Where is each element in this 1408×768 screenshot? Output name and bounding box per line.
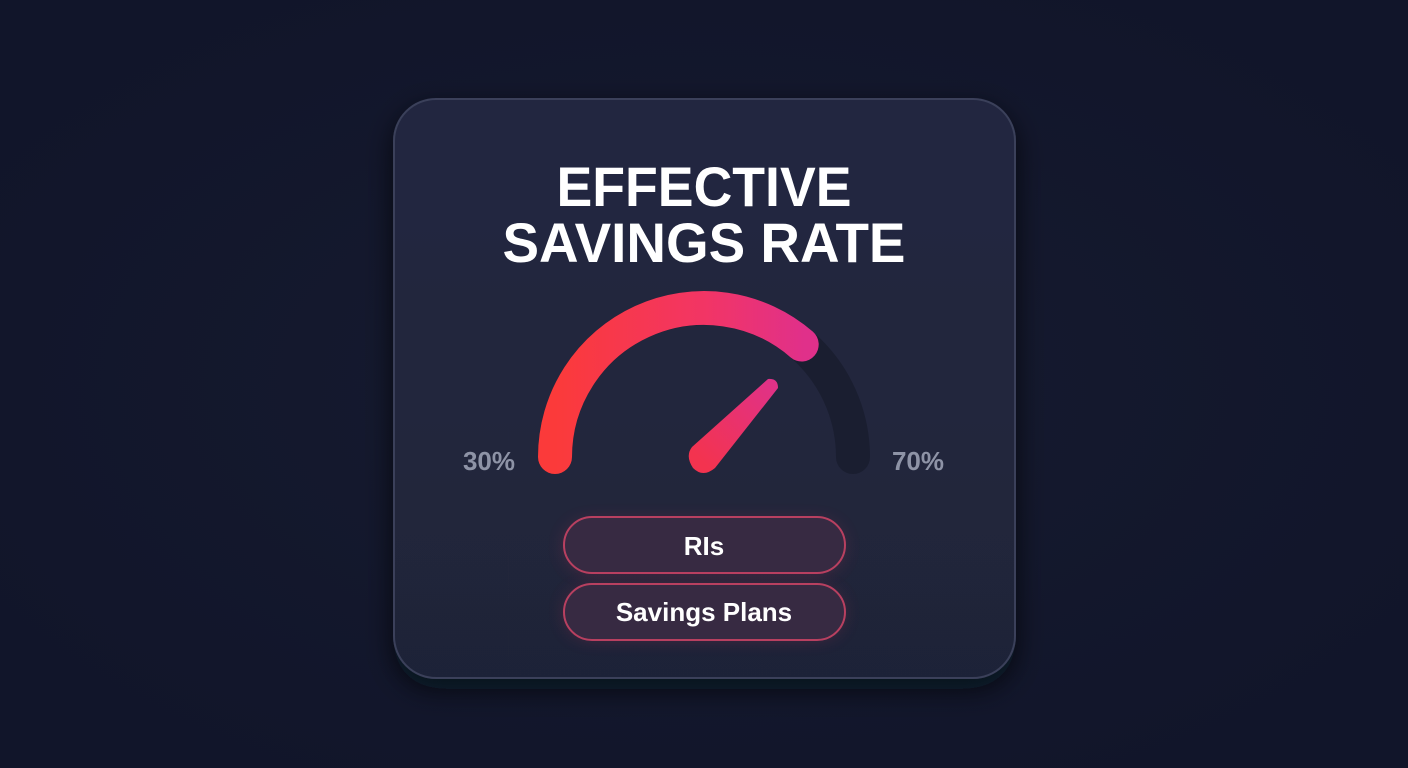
needle xyxy=(689,379,778,473)
title xyxy=(502,155,906,274)
button: RIs: RIs xyxy=(684,531,724,561)
button: Savings Plans: Savings Plans xyxy=(616,597,792,627)
button: Savings Plans xyxy=(564,584,845,640)
label: 70%: 70% xyxy=(892,446,944,476)
label: 30%: 30% xyxy=(463,446,515,476)
panel: card xyxy=(394,99,1015,678)
gauge xyxy=(555,308,853,473)
button: RIs xyxy=(564,517,845,573)
title: SAVINGS RATE xyxy=(502,211,906,274)
title: EFFECTIVE xyxy=(556,155,852,218)
